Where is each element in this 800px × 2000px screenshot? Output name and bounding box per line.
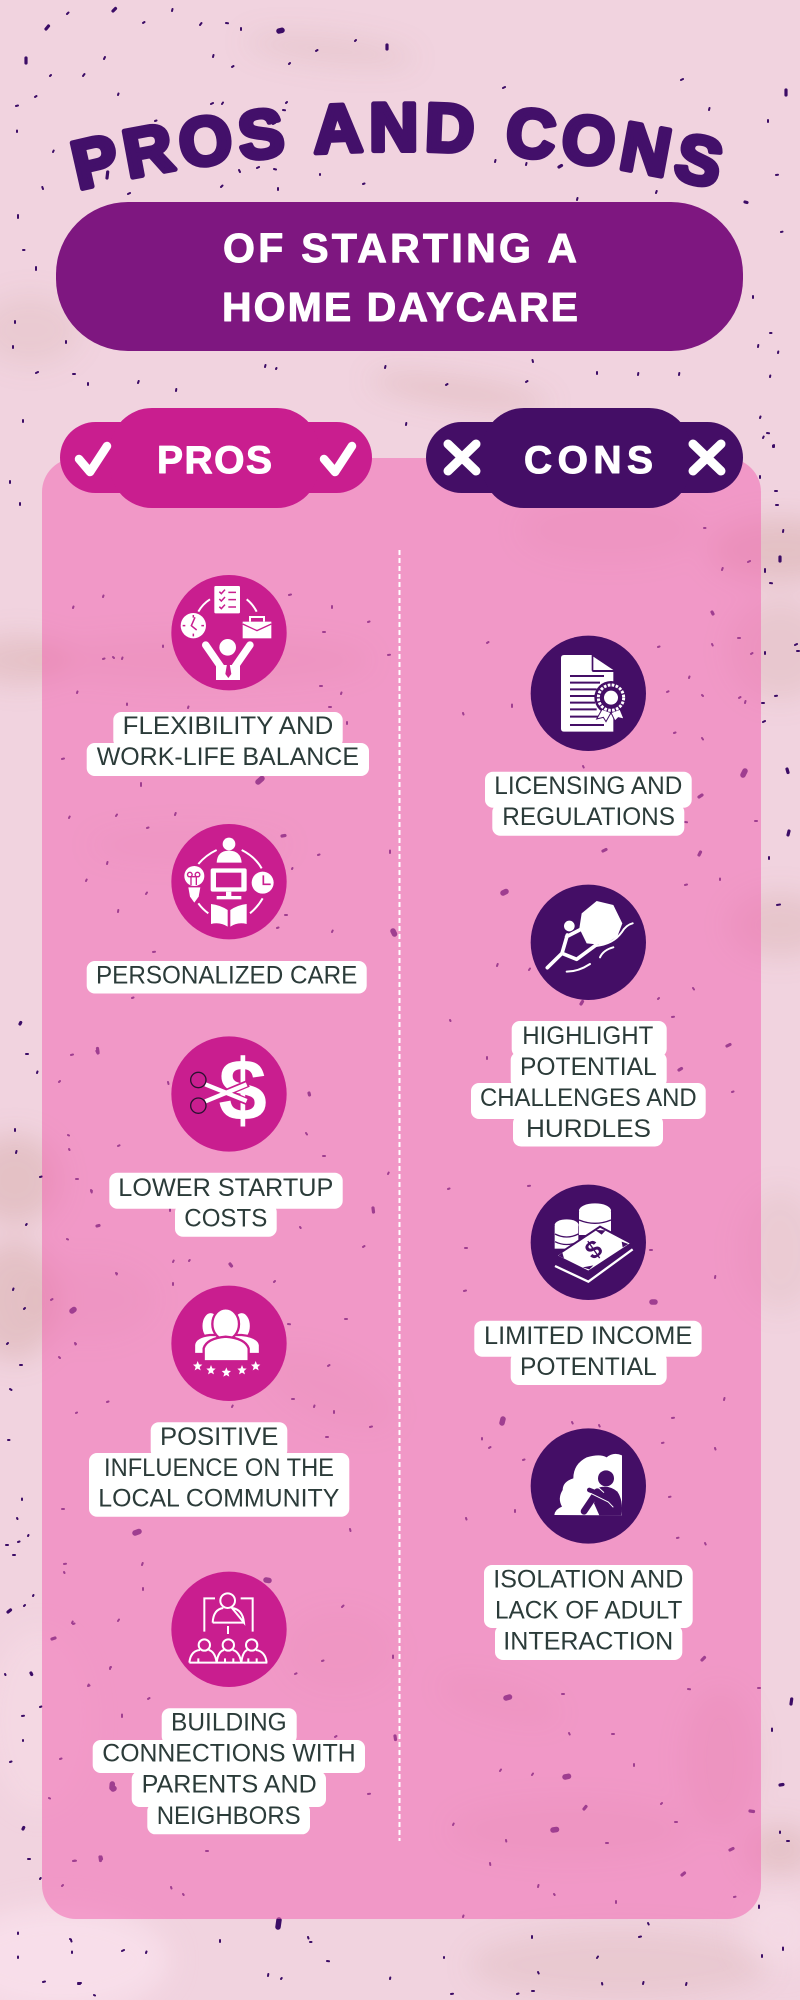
label: ISOLATION AND xyxy=(493,1565,683,1593)
label: PARENTS AND xyxy=(142,1771,317,1799)
label: BUILDING xyxy=(171,1709,287,1737)
center dashed divider xyxy=(398,550,400,1841)
con item: limited income potential xyxy=(474,1185,702,1385)
icon: work-life balance xyxy=(171,575,287,690)
subtitle banner xyxy=(56,202,743,351)
label: CONNECTIONS WITH xyxy=(102,1740,356,1768)
label xyxy=(484,1565,693,1660)
pro item: positive influence on the local community xyxy=(89,1286,349,1517)
label: INFLUENCE ON THE xyxy=(104,1454,334,1482)
icon: isolated figure xyxy=(531,1428,646,1544)
panel: comparison backdrop xyxy=(42,458,761,1919)
label xyxy=(109,1173,343,1237)
icon: coins and banknote xyxy=(531,1185,646,1300)
label: POSITIVE xyxy=(160,1423,278,1451)
icon: left check xyxy=(79,446,107,472)
label: POTENTIAL xyxy=(520,1353,657,1381)
cons header badge xyxy=(426,408,743,508)
icon: right cross xyxy=(693,444,721,471)
con item: isolation and lack of adult interaction xyxy=(484,1428,693,1660)
icon: right check xyxy=(324,446,352,472)
label: INTERACTION xyxy=(503,1627,673,1655)
pro item: lower startup costs xyxy=(109,1036,343,1237)
subtitle banner: OF STARTING A xyxy=(223,225,577,271)
label: LIMITED INCOME xyxy=(484,1322,692,1350)
label: LICENSING AND xyxy=(494,772,682,800)
label xyxy=(87,712,369,776)
con item: licensing and regulations xyxy=(485,636,692,836)
label: NEIGHBORS xyxy=(157,1802,301,1830)
label: LOCAL COMMUNITY xyxy=(98,1485,340,1513)
icon: connected people xyxy=(171,1572,287,1687)
icon: scissors cutting dollar xyxy=(171,1036,287,1152)
label: LACK OF ADULT xyxy=(495,1596,682,1624)
label xyxy=(89,1422,349,1517)
label: FLEXIBILITY AND xyxy=(123,712,333,740)
label: PERSONALIZED CARE xyxy=(96,961,357,989)
label: CHALLENGES AND xyxy=(480,1084,697,1112)
label: COSTS xyxy=(184,1205,267,1233)
label: REGULATIONS xyxy=(502,803,675,831)
icon: coins and banknote: $ xyxy=(580,1234,608,1266)
label xyxy=(474,1321,702,1385)
title: pros and cons: PROS AND CONS xyxy=(70,101,723,191)
pro item: building connections with parents and neighbors xyxy=(93,1572,365,1834)
pros header badge: PROS xyxy=(157,439,272,482)
label: POTENTIAL xyxy=(520,1053,657,1081)
label xyxy=(471,1021,706,1146)
icon: left cross xyxy=(448,444,476,471)
label xyxy=(93,1708,365,1834)
label: HIGHLIGHT xyxy=(522,1022,653,1050)
pro item: flexibility and work-life balance xyxy=(87,575,369,776)
label: WORK-LIFE BALANCE xyxy=(97,743,359,771)
icon: person pushing boulder xyxy=(531,885,646,1000)
icon: scissors cutting dollar: $ xyxy=(218,1041,267,1139)
icon: personalized care xyxy=(171,824,287,939)
pro item: personalized care xyxy=(87,824,367,994)
label: LOWER STARTUP xyxy=(118,1174,333,1202)
pros header badge xyxy=(60,408,372,508)
label xyxy=(485,772,692,836)
subtitle banner: HOME DAYCARE xyxy=(222,284,578,330)
icon: community with stars xyxy=(171,1286,287,1401)
cons header badge: CONS xyxy=(524,439,653,482)
icon: certificate document xyxy=(531,636,646,751)
con item: highlight potential challenges and hurdles xyxy=(471,885,706,1146)
label: HURDLES xyxy=(526,1115,651,1143)
